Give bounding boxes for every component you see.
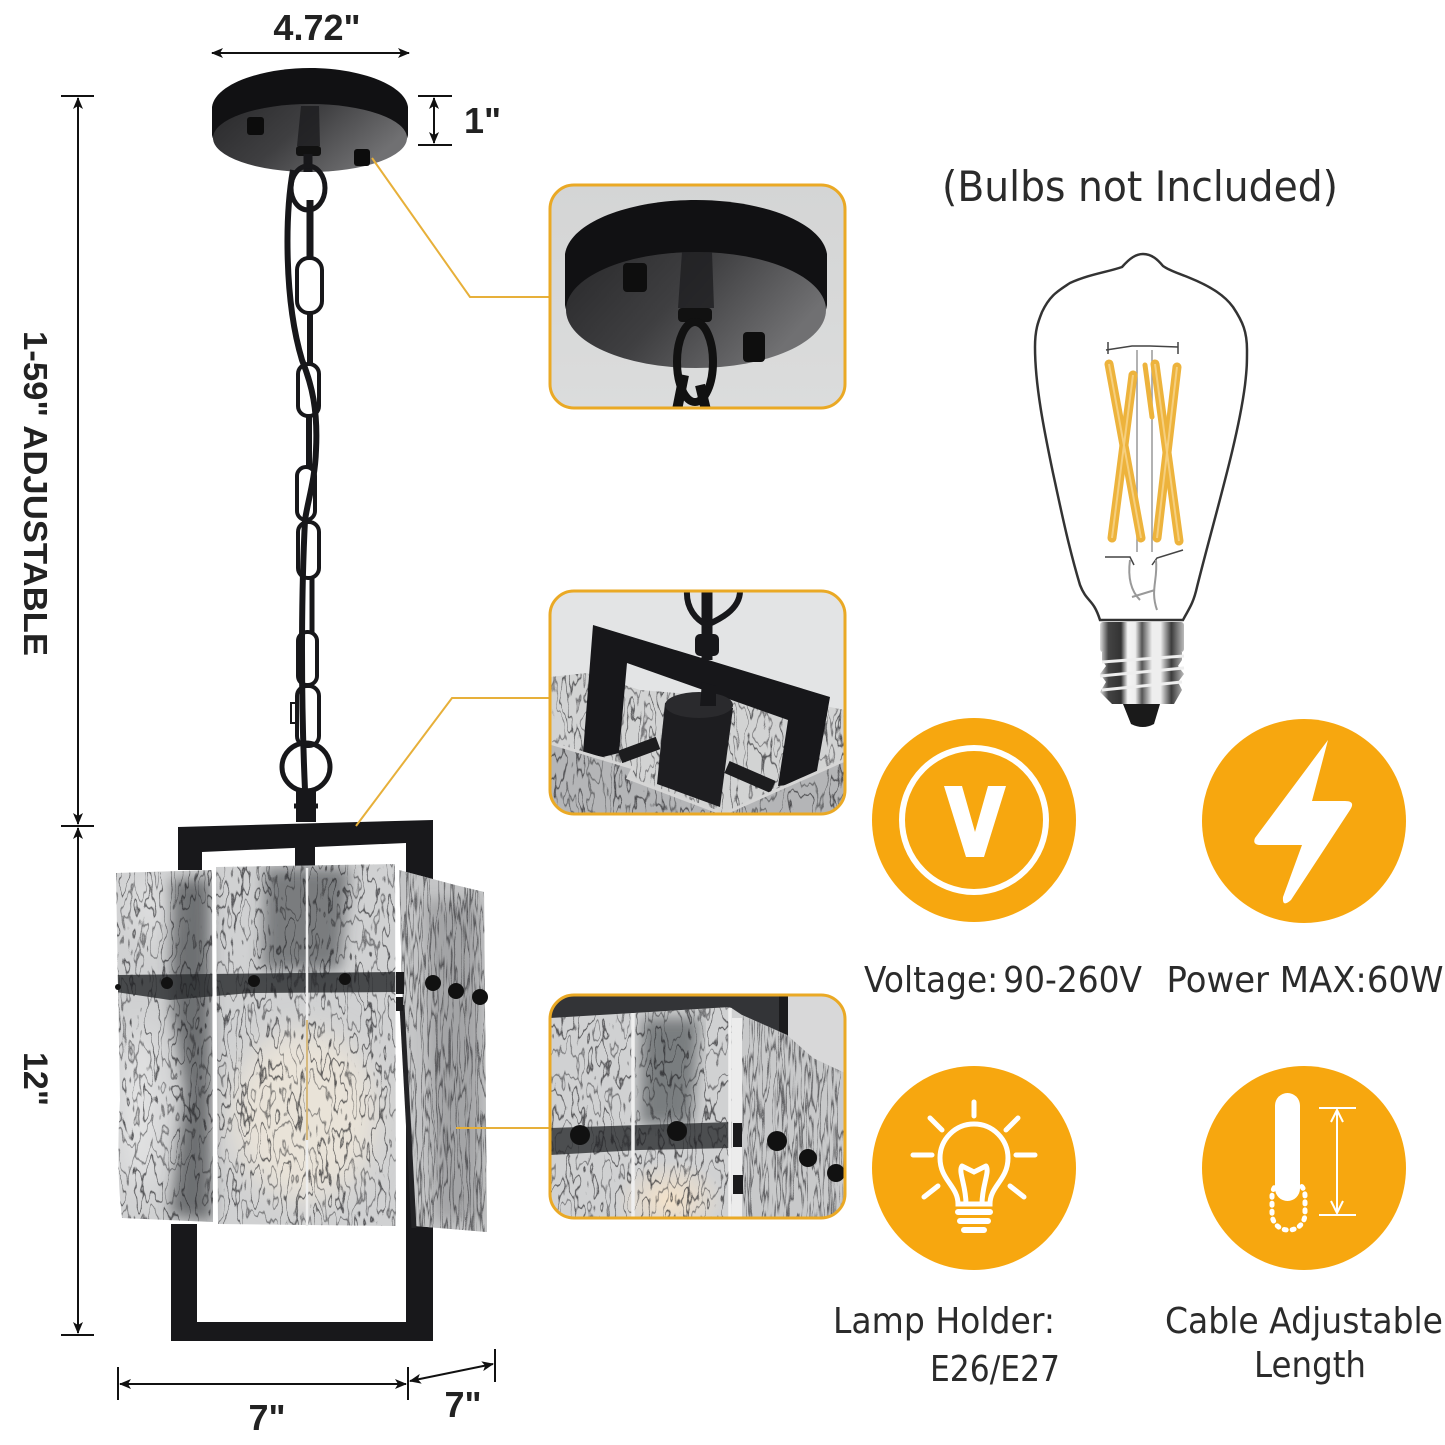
icon: lamp holder xyxy=(872,1066,1076,1270)
label: voltage: Voltage: 90-260V xyxy=(864,960,1142,1001)
canopy xyxy=(212,68,408,172)
inset: glass detail xyxy=(550,995,845,1240)
icon: power xyxy=(1202,719,1406,923)
dimension: body width and depth: 7" xyxy=(248,1397,286,1438)
label: lamp holder: E26/E27 xyxy=(930,1349,1060,1390)
chain xyxy=(282,154,330,822)
dimension: canopy height 1 inch: 1" xyxy=(464,100,501,141)
dimension: body width and depth: 7" xyxy=(444,1384,482,1425)
glass shade xyxy=(110,860,490,1235)
label: cable adjustable length: Length xyxy=(1254,1345,1366,1386)
pendant lamp xyxy=(110,68,490,1341)
dimension: chain length: 1-59" ADJUSTABLE xyxy=(17,331,54,656)
label: cable adjustable length xyxy=(1165,1301,1443,1386)
icon: edison bulb xyxy=(1035,254,1247,727)
inset: frame detail xyxy=(550,591,845,815)
icon: voltage xyxy=(872,718,1076,922)
label: lamp holder xyxy=(833,1301,1060,1390)
note: bulbs not included: (Bulbs not Included) xyxy=(942,162,1338,211)
dimension: body height: 12" xyxy=(16,1052,54,1106)
inset: canopy detail xyxy=(550,185,845,410)
black frame xyxy=(171,820,433,1341)
callout lines xyxy=(356,158,550,1128)
dimension: body width and depth xyxy=(118,1349,495,1438)
icon: adjustable cable xyxy=(1202,1066,1406,1270)
dimension: canopy height 1 inch xyxy=(418,96,501,145)
dimension: canopy width 4.72 inches: 4.72" xyxy=(273,7,361,48)
dimension: chain length xyxy=(17,96,94,826)
label: lamp holder: Lamp Holder: xyxy=(833,1301,1055,1342)
